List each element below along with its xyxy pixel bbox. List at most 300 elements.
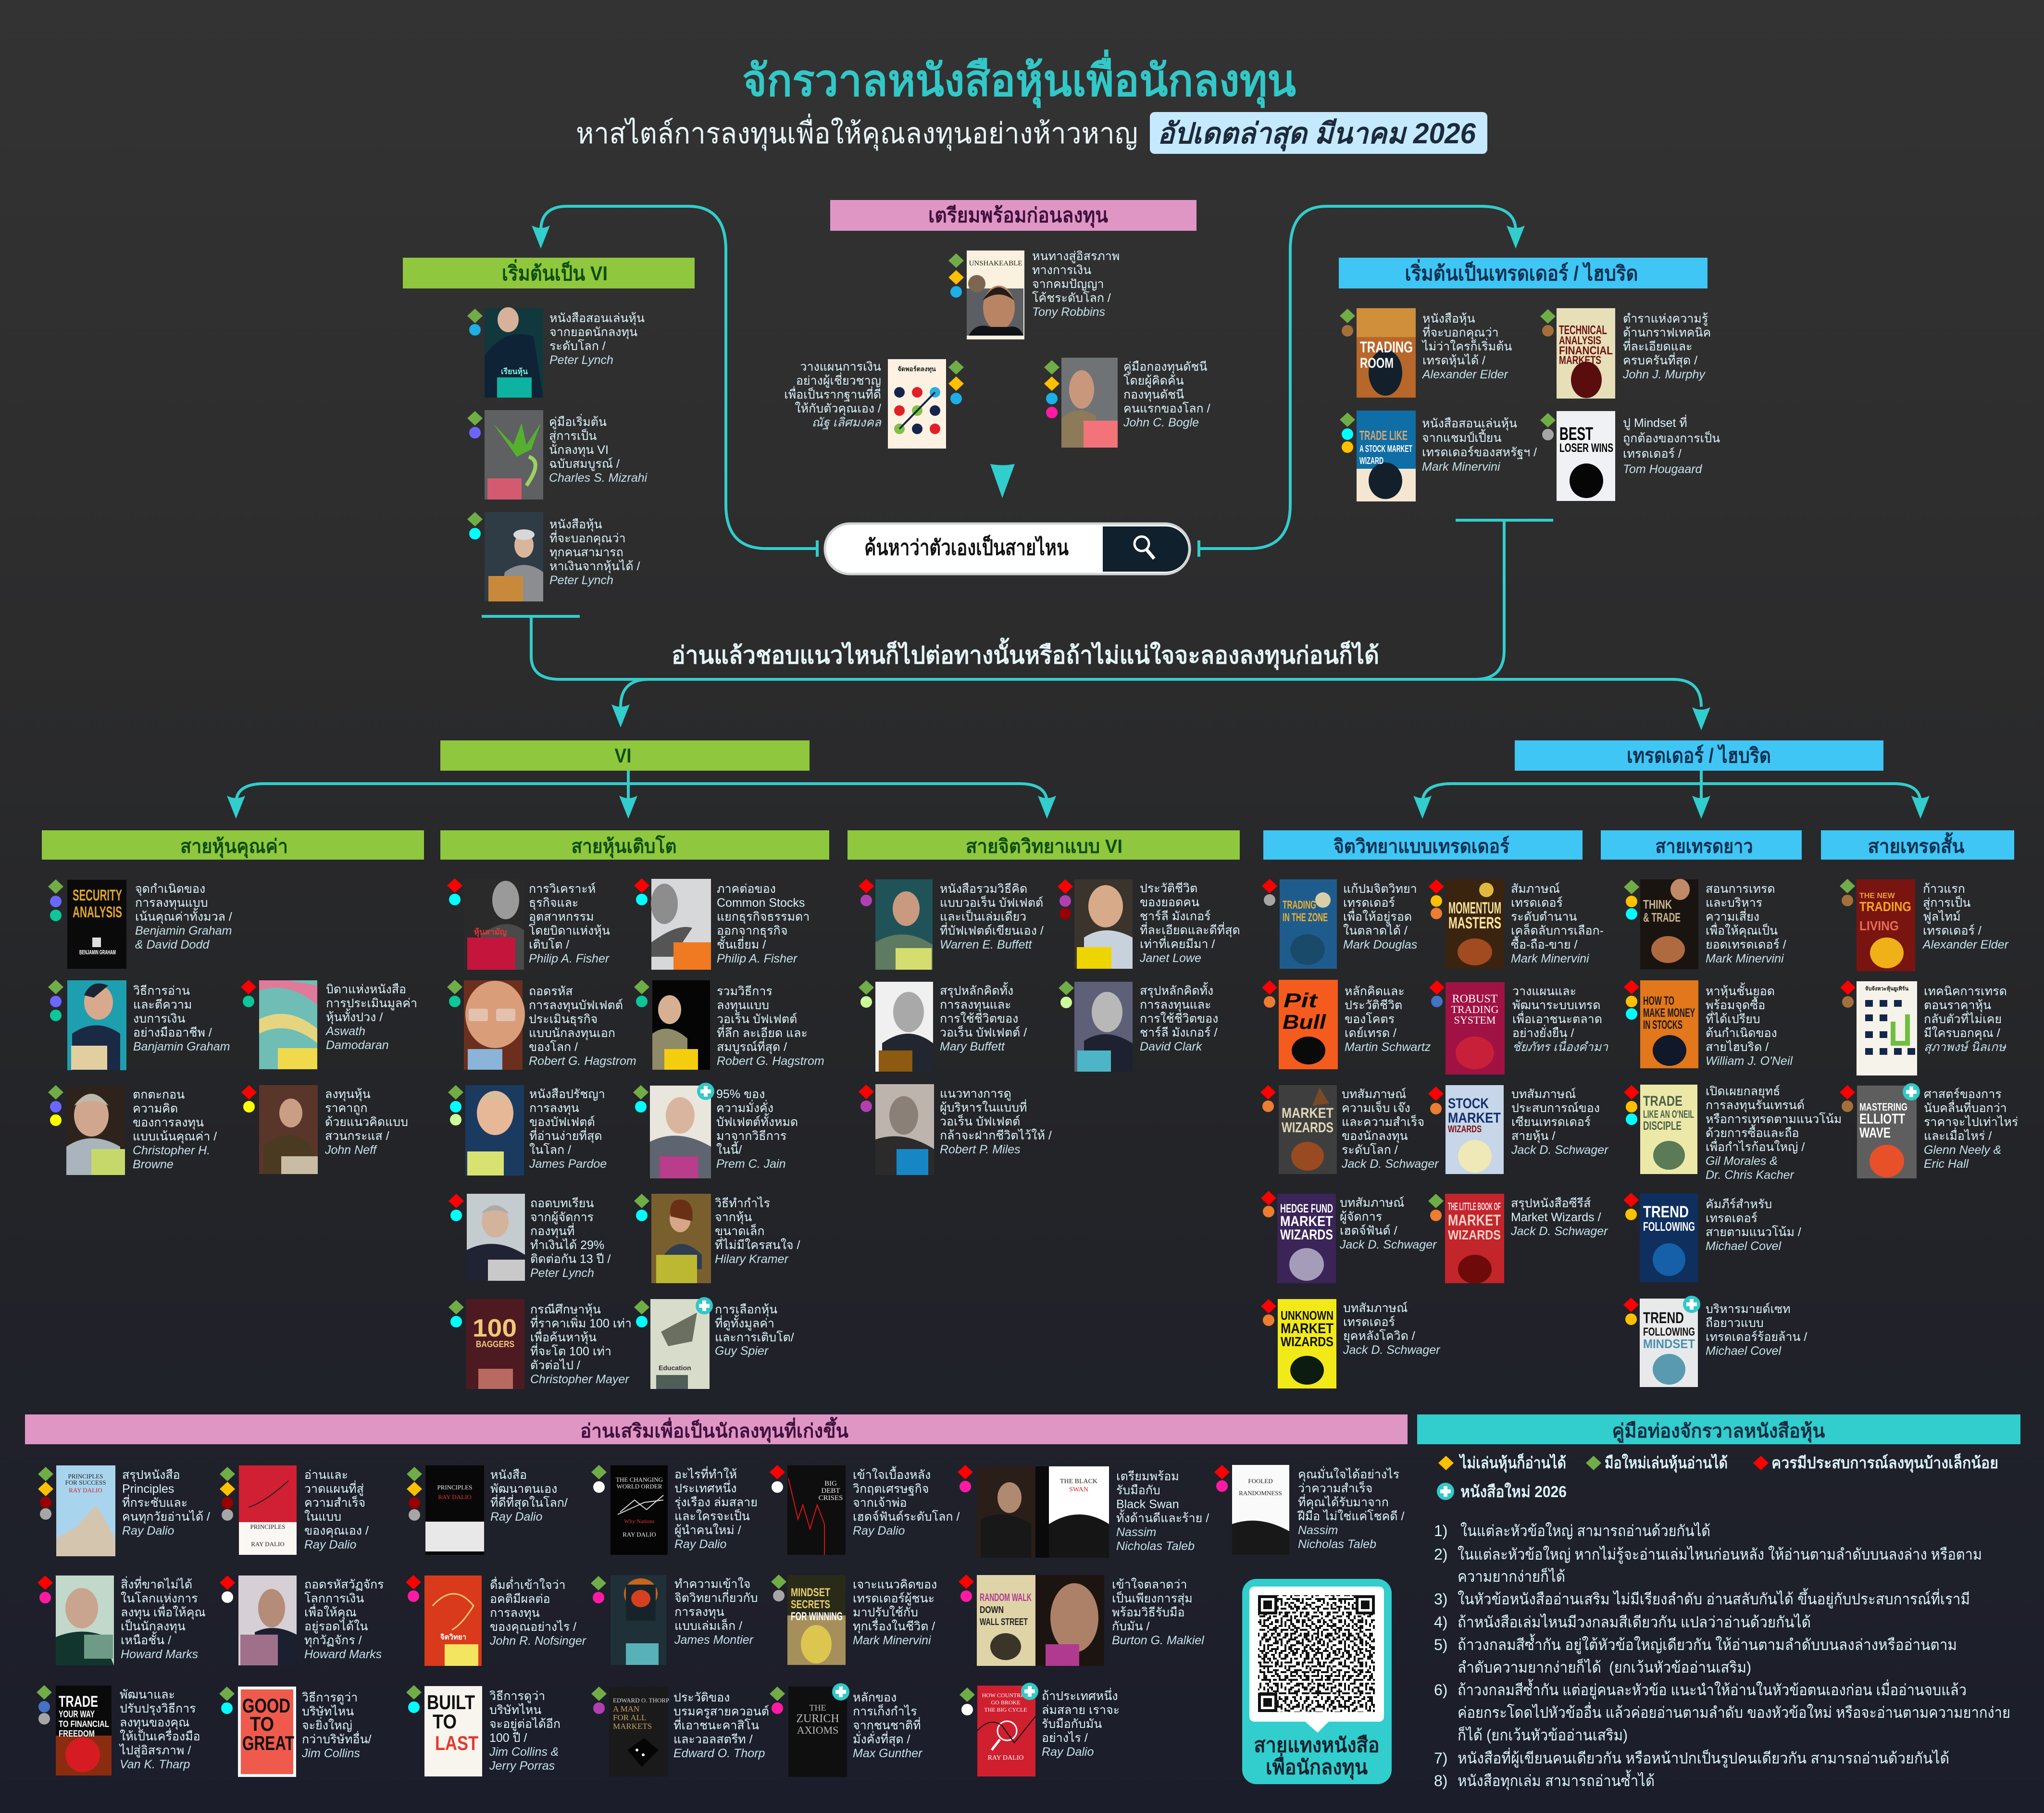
book: Changing World Order: THE CHANGING (616, 1476, 663, 1483)
book: John Neff on Investing: ด้วยแนวคิดแบบ (325, 1115, 408, 1129)
book: Random Walk Down Wall Street: WALL STREET (980, 1617, 1028, 1627)
book: Mastering the Market Cycle: เพื่อให้คุณ (304, 1604, 357, 1620)
book: A Man for All Markets: และวอลสตรีท / (673, 1733, 753, 1746)
book: 100 Baggers: Christopher Mayer (530, 1373, 630, 1386)
book: Momentum Masters: ซื้อ-ถือ-ขาย / (1511, 936, 1578, 951)
book: 100 Baggers: เพื่อค้นหาหุ้น (530, 1329, 597, 1345)
book: Trade Like a Stock Market Wizard (1340, 411, 1537, 501)
book: Unshakeable: โค้ชระดับโลก / (1032, 291, 1111, 305)
book: Pit Bull: Bull (1283, 1011, 1327, 1033)
reading rules: ลำดับความยากง่ายก็ได้ (ยกเว้นหัวข้ออ่านเสริม) (1458, 1658, 1751, 1676)
book: Changing World Order: WORLD ORDER (617, 1483, 662, 1490)
book: U-turn stock trading: เทคนิคการเทรด (1924, 985, 2007, 998)
book: Trend Following Mindset: ถือยาวแบบ (1706, 1316, 1764, 1330)
heading: value (42, 830, 424, 860)
book: Best Loser Wins: Tom Hougaard (1623, 463, 1703, 476)
book: How Buffett Does It: ที่อ่านง่ายที่สุด (529, 1127, 602, 1143)
heading: prepare before investing: เตรียมพร้อมก่อนลงทุน (928, 204, 1108, 228)
book: plan your finance (784, 359, 964, 449)
book: One Up On Wall Street: หนังสือหุ้น (549, 518, 602, 532)
book: Principles: หนังสือ (490, 1468, 527, 1482)
book: Little Book of Behavioral Investing: การลงทุน (674, 1605, 724, 1619)
book: Stock Market Wizards (1428, 1085, 1609, 1174)
book: plan your finance: ณัฐ เลิศมงคล (812, 416, 882, 430)
book: Random Walk Down Wall Street: Burton G. Malkiel (1112, 1634, 1205, 1647)
heading: start as VI: เริ่มต้นเป็น VI (502, 259, 608, 285)
book: The Zurich Axioms: ZURICH (796, 1713, 839, 1725)
book: Trade Like an O'Neil Disciple: LIKE AN O'NEIL (1643, 1108, 1694, 1120)
book: Little Book of Value Investing: ความคิด (133, 1102, 178, 1115)
book: Technical Analysis: ด้านกราฟเทคนิค (1623, 326, 1711, 339)
book: Trading in the Zone: แก้ปมจิตวิทยา (1343, 882, 1417, 896)
book: Think and Trade Like a Champion: ยอดเทรดเดอร์ / (1706, 938, 1786, 951)
book: Technical Analysis: MARKETS (1559, 354, 1601, 367)
book: Hedge Fund Market Wizards: HEDGE FUND (1280, 1202, 1333, 1215)
reading rules: ความยากง่ายก็ได้ (1458, 1567, 1565, 1585)
book: How Buffett Does It: การลงทุน (529, 1101, 579, 1115)
book: New Trading for a Living: ก้าวแรก (1923, 882, 1965, 896)
book: How to Make Money in Stocks: หาหุ้นชั้นยอด (1706, 982, 1775, 999)
heading: guide: คู่มือท่องจักรวาลหนังสือหุ้น (1612, 1421, 1825, 1443)
book: Security Analysis: Benjamin Graham (135, 924, 232, 938)
book: Market Wizards: บทสัมภาษณ์ (1342, 1088, 1406, 1101)
book: Momentum Masters: สัมภาษณ์ (1511, 882, 1560, 896)
reading rules: ก็ได้ (ยกเว้นหัวข้ออ่านเสริม) (1458, 1726, 1628, 1744)
book: Essays of Warren Buffett: และเป็นเล่มเดียว (940, 909, 1026, 924)
book: plan your finance: วางแผนการเงิน (800, 360, 881, 374)
book: A Man for All Markets: A MAN (613, 1704, 639, 1713)
book: The Most Important Thing: เป็นนักลงทุน (121, 1619, 186, 1634)
book: Damn Right: ประวัติชีวิต (1140, 882, 1197, 895)
book: Trade Like a Stock Market Wizard: หนังสือสอนเล่นหุ้น (1422, 417, 1517, 431)
book: Trend Following Mindset: MINDSET (1643, 1337, 1695, 1351)
book: Learn to Earn: Peter Lynch (549, 353, 613, 367)
update date pill: อัปเดตล่าสุด มีนาคม 2026 (1158, 117, 1476, 151)
book: Momentum Masters (1429, 879, 1604, 969)
book: Tao of Warren Buffett: การลงทุนและ (940, 998, 1011, 1012)
book: Good to Great: บริษัทไหน (302, 1704, 354, 1718)
search bar: ค้นหาว่าตัวเองเป็นสายไหน (864, 535, 1069, 560)
book: Damn Right: ที่ละเอียดและดีที่สุด (1140, 922, 1240, 938)
book: Think and Trade Like a Champion: สอนการเทรด (1706, 882, 1775, 896)
book: One Up On Wall Street: ที่จะบอกคุณว่า (549, 530, 626, 546)
book: New Trading for a Living (1840, 879, 2009, 971)
book: Paths to Wealth: ชั้นเยี่ยม / (717, 936, 766, 951)
book: Essays of Warren Buffett: หนังสือรวมวิธีคิด (940, 882, 1027, 896)
book: Big Debt Crises: CRISES (819, 1494, 843, 1502)
heading: further reading: อ่านเสริมเพื่อเป็นนักลงทุนที่เก่งขึ้น (580, 1417, 848, 1443)
book: Principles Your Guided Journal: ของคุณเอง / (304, 1524, 369, 1538)
book: Think and Trade Like a Champion (1624, 879, 1786, 969)
book: Built to Last: วิธีการดูว่า (489, 1689, 545, 1703)
book: Market Wizards: และความสำเร็จ (1342, 1114, 1424, 1129)
book: Stock Market Wizards: Jack D. Schwager (1511, 1143, 1609, 1157)
book: Market Wizards: ความเจ็บ เจ๊ง (1342, 1100, 1410, 1115)
book: Mindset Secrets for Winning: Mark Minervini (853, 1634, 932, 1647)
book: John Bogle: คู่มือกองทุนดัชนี (1123, 360, 1207, 374)
heading: value: สายหุ้นคุณค่า (180, 836, 288, 859)
book: Trade Your Way to Financial Freedom: พัฒนาและ (120, 1688, 175, 1701)
book: Big Debt Crises: เฮดจ์ฟันด์ระดับโลก / (853, 1510, 960, 1524)
reading rules: 3) (1434, 1590, 1447, 1608)
book: Random Walk Down Wall Street: เข้าใจตลาดว่า (1112, 1577, 1187, 1591)
heading: trader hybrid: เทรดเดอร์ / ไฮบริด (1627, 744, 1771, 767)
book: Think and Trade Like a Champion: ความเสี่ยง (1706, 908, 1759, 924)
book: Security Analysis: SECURITY (73, 887, 122, 904)
book: Security Analysis (48, 879, 232, 969)
book: Principles: ที่ดีที่สุดในโลก/ (490, 1494, 568, 1510)
book: A Man for All Markets: Edward O. Thorp (673, 1747, 765, 1760)
book: Common Stocks and Uncommon Profits: การวิเคราะห์ (529, 882, 596, 896)
book: Robust Trading System: เพื่อเอาชนะตลาด (1512, 1011, 1602, 1026)
book: The Black Swan (958, 1465, 1209, 1558)
book: Mastering the Market Cycle: โลกการเงิน (304, 1591, 364, 1605)
book: How Buffett Does It: ของบัฟเฟตต์ (529, 1115, 595, 1129)
book: The Black Swan: THE BLACK (1060, 1478, 1097, 1485)
reading rules: ในแต่ละหัวข้อใหญ่ สามารถอ่านด้วยกันได้ (1460, 1522, 1710, 1539)
book: Big Debt Crises: จากเจ้าพ่อ (853, 1496, 907, 1510)
book: Interpretation of Financial Statements: อย่างมืออาชีพ / (133, 1026, 212, 1039)
book: Education of a Value Investor: Education (659, 1364, 691, 1372)
book: Unknown Market Wizards: UNKNOWN (1281, 1308, 1334, 1323)
arrow: search to trader start (1199, 206, 1525, 557)
book: Education of a Value Investor: ที่ดูทั้งมูลค่า (715, 1314, 774, 1331)
book: Little Book of Market Wizards (1428, 1194, 1608, 1284)
legend: ควรมีประสบการณ์ลงทุนบ้างเล็กน้อย (1771, 1453, 1998, 1473)
book: Trading in the Zone: เพื่อให้อยู่รอด (1343, 908, 1412, 924)
book: U-turn stock trading: สุภาพงษ์ นิลเกษ (1924, 1040, 2007, 1054)
heading: start as trader: เริ่มต้นเป็นเทรดเดอร์ / ไฮบริด (1405, 259, 1638, 285)
arrow: VI branches (227, 771, 1056, 819)
book: The Black Swan: Nicholas Taleb (1116, 1539, 1195, 1553)
book: Fooled by Randomness: ที่คุณได้รับมาจาก (1298, 1494, 1389, 1510)
book: Little Book of Valuation (241, 980, 417, 1069)
book: Robust Trading System (1429, 980, 1608, 1075)
book: The Most Important Thing: ลงทุน เพื่อให้คุณ (121, 1604, 206, 1620)
book: 100 Baggers: BAGGERS (476, 1339, 514, 1349)
book: Robust Trading System: วางแผนและ (1512, 985, 1576, 998)
book: plan your finance: อย่างผู้เชี่ยวชาญ (796, 372, 881, 388)
book: How to Make Money in Stocks: HOW TO (1643, 994, 1674, 1008)
book: Little Book of Valuation: การประเมินมูลค่า (326, 997, 417, 1011)
book: Stock Market Wizards: WIZARDS (1448, 1124, 1482, 1135)
book: Good to Great: GREAT (242, 1732, 294, 1754)
QR code (1258, 1595, 1375, 1712)
book: Pit Bull: Martin Schwartz (1345, 1040, 1431, 1054)
book: Psychology of Investing: ดื่มด่ำเข้าใจว่า (490, 1576, 566, 1592)
book: Psychology of Investing: John R. Nofsinger (489, 1634, 587, 1648)
book: 100 Baggers: ที่จะโต 100 เท่า (530, 1343, 611, 1358)
book: How Countries Go Broke: ล่มสลาย เราจะ (1042, 1703, 1120, 1717)
book: Tao of Charlie Munger (1059, 981, 1218, 1072)
book: Stock Market Wizards: บทสัมภาษณ์ (1511, 1088, 1576, 1101)
book: Trade Like an O'Neil Disciple: ด้วยการซื้อและถือ (1706, 1124, 1799, 1140)
book: U-turn stock trading: จับจังหวะหุ้นยูเทิร์น (1865, 986, 1909, 992)
book: John Neff on Investing: ราคาถูก (325, 1101, 368, 1115)
book: Built to Last: 100 ปี / (489, 1731, 527, 1745)
book: Robust Trading System: พัฒนาระบบเทรด (1512, 999, 1600, 1012)
book: Hedge Fund Market Wizards: Jack D. Schwager (1339, 1238, 1437, 1251)
book: Common Stocks and Uncommon Profits (447, 878, 610, 970)
book: Best Loser Wins: ปู Mindset ที่ (1623, 414, 1687, 430)
heading: short trade (1821, 830, 2014, 860)
book: Big Debt Crises: Ray Dalio (853, 1524, 905, 1538)
book: Little Book of Behavioral Investing: แบบเล่มเล็ก / (674, 1618, 742, 1633)
book: Trading in the Zone: ในตลาดได้ / (1343, 924, 1408, 938)
book: New Trading for a Living: สู่การเป็น (1923, 895, 1970, 910)
reading rules: ในแต่ละหัวข้อใหญ่ หากไม่รู้จะอ่านเล่มไหนก่อนหลัง ให้อ่านตามลำดับบนลงล่าง หรือตาม (1458, 1546, 1982, 1564)
book: One Up On Wall Street (467, 512, 640, 601)
book: How Countries Go Broke: HOW COUNTRIES (982, 1692, 1029, 1699)
book: Random Walk Down Wall Street: กับมัน / (1112, 1620, 1150, 1633)
book: Principles for Success (38, 1465, 210, 1556)
book: Buffett Beyond Value: ความมั่งคั่ง (716, 1100, 773, 1115)
book: Robust Trading System: TRADING (1451, 1003, 1499, 1015)
book: Security Analysis: การลงทุนแบบ (135, 896, 208, 910)
QR panel: เพื่อนักลงทุน (1266, 1753, 1368, 1780)
book: Random Walk Down Wall Street: RANDOM WALK (980, 1591, 1032, 1603)
book: Principles: RAY DALIO (438, 1493, 472, 1500)
heading: start as trader (1339, 258, 1707, 288)
book: The Black Swan: SWAN (1069, 1486, 1088, 1493)
book: Mastering the Market Cycle (220, 1575, 384, 1665)
book: Best Loser Wins: เทรดเดอร์ / (1623, 447, 1682, 461)
book: The Black Swan: รับมือกับ (1116, 1484, 1160, 1497)
legend: มือใหม่เล่นหุ้นอ่านได้ (1605, 1453, 1728, 1473)
book: John Neff on Investing (241, 1085, 408, 1174)
book: Trend Following Mindset (1623, 1296, 1807, 1387)
book: A Man for All Markets: EDWARD O. THORP (613, 1697, 669, 1704)
book: How to Make Money in Stocks: ที่ได้เปรียบ (1706, 1011, 1760, 1026)
reading rules (1434, 1522, 2010, 1790)
book: Big Profits from Small Stocks: ขนาดเล็ก (715, 1224, 764, 1238)
heading: VI psychology (848, 830, 1240, 860)
book: Changing World Order: ผู้นำคนใหม่ / (674, 1523, 741, 1538)
book: The Most Important Thing: สิ่งที่ขาดไม่ได้ (121, 1576, 192, 1591)
book: Big Profits from Small Stocks (634, 1194, 800, 1283)
book: How Buffett Does It: James Pardoe (529, 1157, 607, 1171)
book: Big Debt Crises: DEBT (821, 1487, 840, 1495)
book: Learn to Earn: ระดับโลก / (549, 339, 606, 353)
book: Little Book of Valuation: Damodaran (326, 1038, 389, 1052)
reading rules: ในหัวข้อหนังสืออ่านเสริม ไม่มีเรียงลำดับ อ่านสลับกันได้ ขึ้นอยู่กับประสบการณ์ที่เรามี (1458, 1588, 1970, 1609)
book: Best Loser Wins: BEST (1559, 424, 1593, 444)
book: Fooled by Randomness (1214, 1465, 1404, 1555)
book: Damn Right (1058, 879, 1240, 969)
book: Unknown Market Wizards: WIZARDS (1281, 1334, 1334, 1349)
book: Trade Your Way to Financial Freedom: FREEDOM (59, 1729, 95, 1738)
book: Tao of Warren Buffett: Mary Buffett (940, 1040, 1005, 1053)
heading: start as VI (403, 258, 695, 288)
book: How Countries Go Broke: GO BROKE (991, 1699, 1021, 1706)
book: Little Book of Value Investing: Christopher H. (133, 1144, 210, 1157)
book: The Most Important Thing: ในโลกแห่งการ (121, 1591, 198, 1605)
book: Mindset Secrets for Winning: MINDSET (791, 1586, 830, 1599)
book: Trade Your Way to Financial Freedom: ไปสู่อิสรภาพ / (119, 1743, 191, 1758)
book: Tao of Charlie Munger: การลงทุนและ (1140, 998, 1211, 1012)
book: Little Book of Valuation: หุ้นทั้งปวง / (326, 1008, 383, 1025)
book: Education of a Value Investor (634, 1297, 794, 1389)
book: Tao of Warren Buffett: การใช้ชีวิตของ (940, 1012, 1018, 1025)
book: Mindset Secrets for Winning: SECRETS (791, 1598, 830, 1611)
book: Built to Last: LAST (435, 1732, 478, 1754)
book: The Zurich Axioms: การเก็งกำไร (853, 1704, 917, 1718)
book: Warren Buffett CEO: แนวทางการดู (940, 1087, 1011, 1101)
book: Best Loser Wins: LOSER WINS (1559, 441, 1613, 455)
book: Essays of Warren Buffett (859, 879, 1044, 970)
book: U-turn stock trading: กลับตัวที่ไม่เคย (1924, 1011, 2002, 1026)
book: Unknown Market Wizards: MARKET (1281, 1321, 1334, 1337)
book: Psychology of Investing: จิตวิทยา (440, 1633, 466, 1641)
book: Momentum Masters: เทรดเดอร์ (1511, 896, 1563, 910)
book: Changing World Order (591, 1465, 758, 1555)
book: Essays of Warren Buffett: Warren E. Buffett (940, 938, 1032, 951)
book: 100 Baggers: กรณีศึกษาหุ้น (530, 1303, 601, 1317)
connector text: อ่านแล้วชอบแนวไหนก็ไปต่อทางนั้นหรือถ้าไม่แน่ใจจะลองลงทุนก่อนก็ได้ (672, 638, 1379, 670)
book: Mindset Secrets for Winning: เทรดเดอร์ผู้ชนะ (853, 1592, 935, 1606)
book: How Countries Go Broke: RAY DALIO (988, 1754, 1023, 1762)
book: Trade Like a Stock Market Wizard: จากแชมป์เปี้ยน (1422, 429, 1501, 445)
book: Big Profits from Small Stocks: Hilary Kramer (715, 1252, 789, 1266)
book: How Countries Go Broke: THE BIG CYCLE (984, 1706, 1027, 1713)
book: Warren Buffett CEO: ผู้บริหารในแบบที่ (940, 1099, 1027, 1115)
book: Think and Trade Like a Champion: เพื่อให้คุณเป็น (1706, 922, 1778, 938)
book: Getting Started in Value Investing (467, 410, 648, 500)
book: Getting Started in Value Investing: ฉบับสมบูรณ์ / (549, 457, 620, 471)
book: Tao of Charlie Munger: สรุปหลักคิดทั้ง (1140, 982, 1213, 998)
book: Security Analysis: จุดกำเนิดของ (135, 882, 205, 896)
book: One Up On Wall Street: หาเงินจากหุ้นได้ / (549, 559, 640, 574)
QR panel: สายแทงหนังสือ (1254, 1734, 1380, 1756)
book: Mindset Secrets for Winning: FOR WINNING (791, 1610, 843, 1623)
book: Big Profits from Small Stocks: จากหุ้น (715, 1211, 752, 1225)
book: Built to Last: Jim Collins & (489, 1745, 559, 1759)
book: Tao of Warren Buffett: วอเร็น บัฟเฟตต์ / (940, 1025, 1027, 1039)
book: The Most Important Thing (37, 1575, 206, 1665)
book: Principles Your Guided Journal: PRINCIPLES (250, 1523, 285, 1530)
book: Come Into My Trading Room: หนังสือหุ้น (1422, 312, 1475, 326)
book: Unshakeable (948, 250, 1120, 339)
book: Mastering the Market Cycle: อยู่รอดได้ใน (304, 1619, 368, 1634)
book: The Essential Buffett: ประเมินธุรกิจ (529, 1013, 598, 1026)
book: Pit Bull (1262, 980, 1431, 1069)
book: Principles: PRINCIPLES (437, 1484, 472, 1491)
book: How Countries Go Broke (960, 1683, 1120, 1776)
book: Technical Analysis: TECHNICAL (1559, 323, 1607, 337)
reading rules: ถ้าวงกลมสีซ้ำกัน อยู่ใต้หัวข้อใหญ่เดียวกัน ให้อ่านตามลำดับบนลงล่างหรืออ่านตาม (1458, 1634, 1957, 1654)
book: Pit Bull: Pit (1284, 989, 1319, 1012)
book: Psychology of Investing: อคติมีผลต่อ (490, 1592, 550, 1606)
book: Essays of Warren Buffett: แบบวอเร็น บัฟเฟตต์ (940, 895, 1043, 910)
book: Interpretation of Financial Statements: วิธีการอ่าน (133, 984, 190, 998)
book: Principles Your Guided Journal: Ray Dalio (304, 1538, 356, 1551)
book: Psychology of Investing: ของคุณอย่างไร / (490, 1620, 576, 1634)
book: U-turn stock trading: ตอนราคาหุ้น (1924, 999, 1991, 1013)
reading rules: ถ้าหนังสือเล่มไหนมีวงกลมสีเดียวกัน แปลว่าอ่านด้วยกันได้ (1458, 1613, 1811, 1631)
book: Principles Your Guided Journal: ในแบบ (304, 1510, 341, 1524)
book: Changing World Order: และใครจะเป็น (674, 1509, 750, 1523)
book: One Up On Wall Street: Peter Lynch (549, 574, 613, 587)
book: John Bogle: กองทุนดัชนี (1123, 388, 1184, 402)
book: Principles Your Guided Journal: อ่านและ (304, 1468, 348, 1482)
book: Little Book of Value Investing: ตกตะกอน (133, 1088, 185, 1101)
book: Common Stocks and Uncommon Profits: อุตสาหกรรม (529, 910, 594, 924)
reading rules: หนังสือทุกเล่ม สามารถอ่านซ้ำได้ (1458, 1770, 1655, 1790)
heading: prepare before investing (830, 200, 1196, 231)
book: Changing World Order: รุ่งเรือง ล่มสลาย (674, 1496, 758, 1510)
book: Mastering Elliott Wave: ELLIOTT (1859, 1111, 1905, 1127)
book: Trend Following: คัมภีร์สำหรับ (1706, 1198, 1772, 1211)
reading rules: 1) (1434, 1522, 1447, 1539)
reading rules: หนังสือที่ผู้เขียนคนเดียวกัน หรือหน้าปกเป็นรูปคนเดียวกัน สามารถอ่านด้วยกันได้ (1458, 1748, 1949, 1768)
book: Built to Last: จะอยู่ต่อได้อีก (489, 1717, 561, 1731)
heading: VI: VI (614, 744, 632, 767)
book: The Essential Buffett: Robert G. Hagstrom (529, 1054, 636, 1068)
book: Unknown Market Wizards (1261, 1299, 1441, 1388)
book: Tao of Charlie Munger: ชาร์ลี มังเกอร์ / (1140, 1026, 1217, 1039)
subtitle: หาสไตล์การลงทุนเพื่อให้คุณลงทุนอย่างห้าวหาญ (576, 113, 1138, 151)
book: Trade Like a Stock Market Wizard: A STOCK MARKET (1359, 444, 1412, 454)
book: Principles Your Guided Journal: RAY DALIO (251, 1540, 285, 1548)
book: Good to Great: วิธีการดูว่า (302, 1691, 358, 1705)
book: 100 Baggers: ที่ราคาเพิ่ม 100 เท่า (530, 1315, 632, 1330)
book: Trend Following: TREND (1643, 1203, 1689, 1221)
book: Little Book of Valuation: Aswath (325, 1025, 365, 1038)
book: The Warren Buffett Way: ที่ลึก ละเอียด และ (717, 1025, 808, 1040)
book: Fooled by Randomness: RANDOMNESS (1239, 1489, 1282, 1497)
book: Market Wizards (1260, 1085, 1439, 1174)
book: Security Analysis: เน้นคุณค่าทั้งมวล / (135, 908, 232, 924)
book: Little Book of Behavioral Investing: James Montier (674, 1633, 754, 1647)
book: Changing World Order: ประเทศหนึ่ง (674, 1480, 736, 1495)
book: Mastering Elliott Wave: MASTERING (1859, 1101, 1907, 1113)
book: Trend Following: สายตามแนวโน้ม / (1706, 1225, 1801, 1239)
book: Getting Started in Value Investing: สู่การเป็น (549, 428, 597, 443)
book: Unknown Market Wizards: บทสัมภาษณ์ (1343, 1301, 1408, 1315)
book: 100 Baggers: 100 (473, 1314, 517, 1342)
book: Mindset Secrets for Winning: ทุกเรื่องในชีวิต / (853, 1618, 935, 1634)
arrow: prepare to search (990, 464, 1015, 498)
book: Come Into My Trading Room: TRADING (1360, 338, 1413, 356)
book: Damn Right: เท่าที่เคยมีมา / (1140, 936, 1215, 951)
book: Technical Analysis: ANALYSIS (1559, 334, 1601, 347)
book: Principles Your Guided Journal (220, 1465, 369, 1555)
book: Built to Last: TO (433, 1710, 457, 1733)
book: Momentum Masters: MOMENTUM (1448, 899, 1501, 917)
book: Big Debt Crises (770, 1465, 960, 1555)
book: Principles for Success: ที่กระชับและ (122, 1494, 187, 1510)
legend (1437, 1453, 1998, 1500)
book: Stock Market Wizards: สายหุ้น / (1511, 1129, 1555, 1143)
book: Fooled by Randomness: Nicholas Taleb (1298, 1538, 1376, 1551)
book: How Countries Go Broke: ถ้าประเทศหนึ่ง (1042, 1688, 1118, 1703)
book: Buffett Beyond Value (633, 1083, 798, 1178)
book: New Trading for a Living: THE NEW (1859, 892, 1895, 900)
book: Mindset Secrets for Winning (771, 1575, 937, 1665)
book: Trade Like an O'Neil Disciple (1624, 1085, 1842, 1182)
book: Buffett Beyond Value: ในนี้/ (716, 1141, 742, 1157)
reading rules: 4) (1434, 1613, 1447, 1631)
book: Big Debt Crises: เข้าใจเบื้องหลัง (853, 1466, 931, 1482)
book: The Black Swan: Nassim (1116, 1525, 1156, 1539)
book: Trade Like a Stock Market Wizard: เทรดเดอร์ของสหรัฐฯ / (1422, 446, 1537, 459)
book: The Warren Buffett Way: รวมวิธีการ (717, 985, 773, 998)
reading rules: 6) (1434, 1681, 1447, 1699)
book: New Trading for a Living: Alexander Elder (1922, 938, 2009, 951)
book: A Man for All Markets: บรมครูสายควอนต์ (673, 1705, 769, 1719)
book: Come Into My Trading Room: ไม่ว่าใครก็เริ่มต้น (1421, 338, 1512, 353)
book: Trade Like an O'Neil Disciple: TRADE (1643, 1093, 1683, 1109)
